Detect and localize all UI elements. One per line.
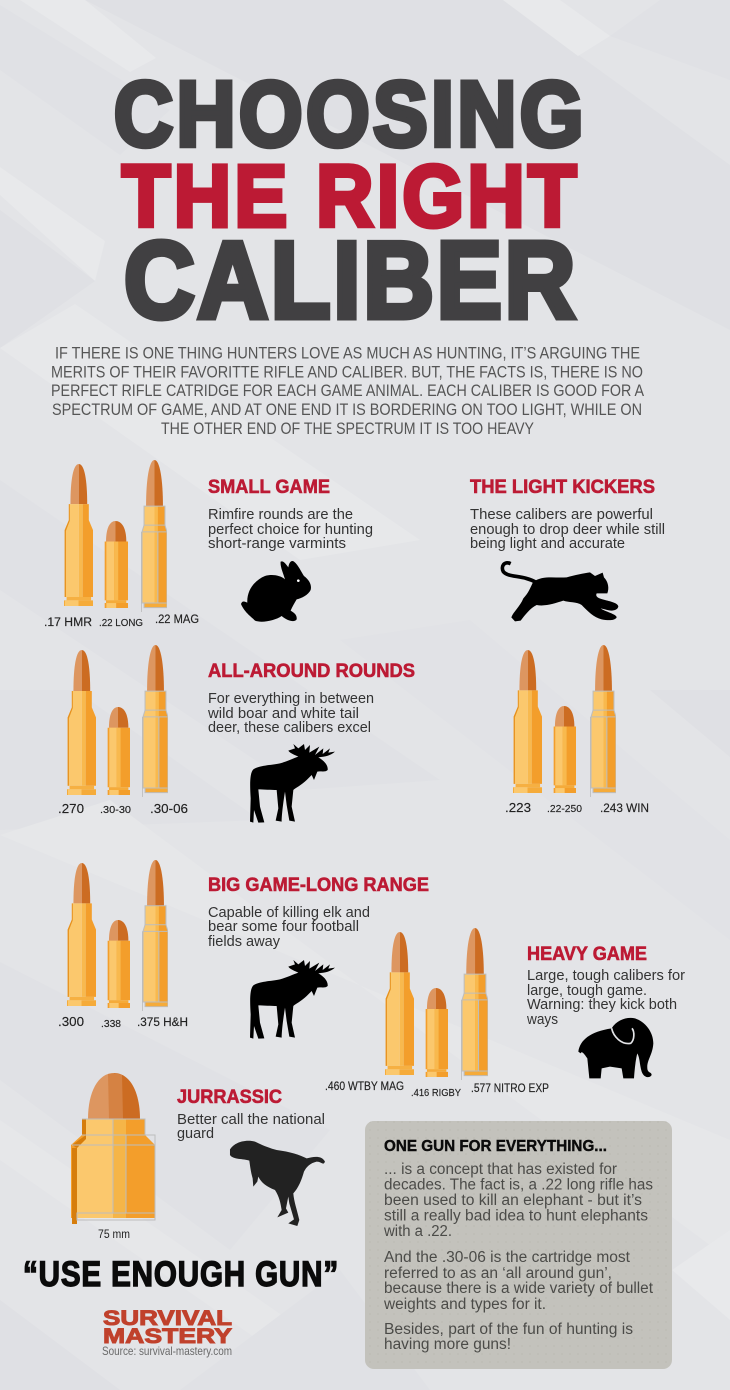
logo: survival mastery bbox=[103, 1306, 232, 1348]
section: all-around text: ALL-AROUND ROUNDS bbox=[208, 660, 415, 682]
intro paragraph: IF THERE IS ONE THING HUNTERS LOVE AS MUCH AS HUNTING, IT’S ARGUING THE bbox=[55, 344, 640, 362]
section: all-around text: wild boar and white tail bbox=[207, 706, 359, 722]
icon: dinosaur bbox=[230, 1141, 325, 1226]
section: jurassic text: Better call the national bbox=[177, 1112, 325, 1128]
intro paragraph: THE OTHER END OF THE SPECTRUM IT IS TOO HEAVY bbox=[161, 420, 534, 438]
section: light kickers text: being light and accurate bbox=[470, 536, 625, 552]
section: light kickers text: These calibers are powerful bbox=[470, 507, 653, 523]
section: heavy game text: ways bbox=[526, 1012, 558, 1028]
source credit: Source: survival-mastery.com bbox=[102, 1344, 232, 1358]
section: all-around text: deer, these calibers excel bbox=[208, 720, 371, 736]
icon: giant 75 mm bullet bbox=[71, 1073, 155, 1241]
section: heavy game bullets bbox=[325, 928, 549, 1099]
section: big game bullets bbox=[58, 860, 188, 1030]
section: heavy game text: large, tough game. bbox=[527, 983, 647, 999]
section: light kickers text: enough to drop deer while still bbox=[470, 522, 665, 538]
title line: caliber: CALIBER bbox=[124, 221, 578, 342]
icon: moose, long range bbox=[250, 960, 335, 1039]
logo: survival mastery: SURVIVAL bbox=[103, 1306, 232, 1330]
intro paragraph bbox=[51, 344, 644, 438]
section: small game text: Rimfire rounds are the bbox=[208, 507, 353, 523]
section: big game text bbox=[208, 874, 429, 950]
panel body text: And the .30-06 is the cartridge most bbox=[384, 1249, 631, 1266]
intro paragraph: MERITS OF THEIR FAVORITTE RIFLE AND CALIBER. BUT, THE FACTS IS, THERE IS NO bbox=[51, 364, 643, 382]
section: small game bullets: .17 HMR bbox=[44, 617, 92, 629]
panel body text: with a .22. bbox=[383, 1223, 452, 1240]
panel body text: referred to as an ‘all around gun’, bbox=[384, 1265, 612, 1282]
section: small game bullets: .22 MAG bbox=[155, 614, 199, 626]
icon: elephant bbox=[578, 1018, 653, 1078]
panel body text: still a really bad idea to hunt elephants bbox=[384, 1208, 648, 1224]
section: big game bullets: .375 H&H bbox=[137, 1017, 188, 1029]
section: all-around bullets: .30-06 bbox=[150, 801, 188, 816]
section: all-around bullets: .30-30 bbox=[100, 804, 131, 816]
panel body text: weights and types for it. bbox=[383, 1296, 546, 1313]
icon: giant 75 mm bullet: 75 mm bbox=[98, 1227, 130, 1241]
section: jurassic text bbox=[177, 1086, 325, 1142]
icon: moose bbox=[250, 744, 335, 823]
section: big game bullets: .300 bbox=[58, 1014, 84, 1029]
section: light kickers bullets: .243 WIN bbox=[600, 803, 649, 815]
section: heavy game text: HEAVY GAME bbox=[527, 943, 647, 965]
section: light kickers bullets: .22-250 bbox=[547, 803, 582, 815]
section: small game text bbox=[208, 476, 373, 552]
section: jurassic text: JURRASSIC bbox=[177, 1086, 282, 1108]
section: heavy game bullets: .460 WTBY MAG bbox=[325, 1081, 404, 1093]
title line: the right: THE RIGHT bbox=[122, 147, 580, 245]
title line: choosing: CHOOSING bbox=[114, 64, 587, 166]
icon: rabbit bbox=[241, 561, 311, 622]
section: light kickers text: THE LIGHT KICKERS bbox=[470, 476, 655, 498]
quote: use enough gun: “USE ENOUGH GUN” bbox=[23, 1255, 339, 1294]
title bbox=[114, 64, 587, 342]
panel body text: Besides, part of the fun of hunting is bbox=[384, 1321, 633, 1338]
section: all-around bullets: .270 bbox=[58, 801, 84, 816]
section: light kickers bullets bbox=[505, 645, 649, 815]
section: big game text: BIG GAME-LONG RANGE bbox=[208, 874, 429, 896]
panel body text bbox=[383, 1161, 654, 1353]
section: heavy game text bbox=[526, 943, 685, 1028]
section: all-around bullets bbox=[58, 645, 188, 816]
section: big game text: bear some four football bbox=[208, 919, 359, 935]
panel body text: decades. The fact is, a .22 long rifle has bbox=[384, 1176, 653, 1194]
section: heavy game bullets: .416 RIGBY bbox=[411, 1087, 461, 1099]
section: big game text: fields away bbox=[208, 934, 281, 950]
intro paragraph: SPECTRUM OF GAME, AND AT ONE END IT IS BORDERING ON TOO LIGHT, WHILE ON bbox=[52, 401, 642, 419]
section: light kickers bullets: .223 bbox=[505, 800, 531, 815]
section: all-around text: For everything in between bbox=[208, 691, 374, 707]
panel body text: because there is a wide variety of bullet bbox=[384, 1280, 654, 1297]
section: small game bullets: .22 LONG bbox=[99, 617, 143, 629]
section: small game text: perfect choice for hunting bbox=[208, 522, 373, 538]
section: all-around text bbox=[207, 660, 415, 736]
intro paragraph: PERFECT RIFLE CATRIDGE FOR EACH GAME ANIMAL. EACH CALIBER IS GOOD FOR A bbox=[51, 382, 644, 400]
section: small game text: SMALL GAME bbox=[208, 476, 330, 498]
section: big game text: Capable of killing elk and bbox=[208, 905, 370, 921]
logo: survival mastery: MASTERY bbox=[103, 1324, 232, 1348]
section: heavy game text: Warning: they kick both bbox=[527, 997, 677, 1013]
section: heavy game bullets: .577 NITRO EXP bbox=[471, 1083, 549, 1095]
section: small game text: short-range varmints bbox=[208, 536, 346, 552]
section: heavy game text: Large, tough calibers for bbox=[527, 968, 685, 984]
section: big game bullets: .338 bbox=[101, 1018, 121, 1030]
panel body text: ... is a concept that has existed for bbox=[384, 1161, 617, 1178]
icon: tiger bbox=[502, 563, 618, 621]
panel body text: been used to kill an elephant - but it’s bbox=[384, 1192, 642, 1209]
section: small game bullets bbox=[44, 460, 199, 629]
section: light kickers text bbox=[470, 476, 665, 552]
panel body text: having more guns! bbox=[384, 1336, 511, 1353]
section: jurassic text: guard bbox=[177, 1126, 214, 1142]
panel: one gun for everything bbox=[365, 1121, 672, 1369]
panel heading: ONE GUN FOR EVERYTHING... bbox=[384, 1138, 607, 1155]
